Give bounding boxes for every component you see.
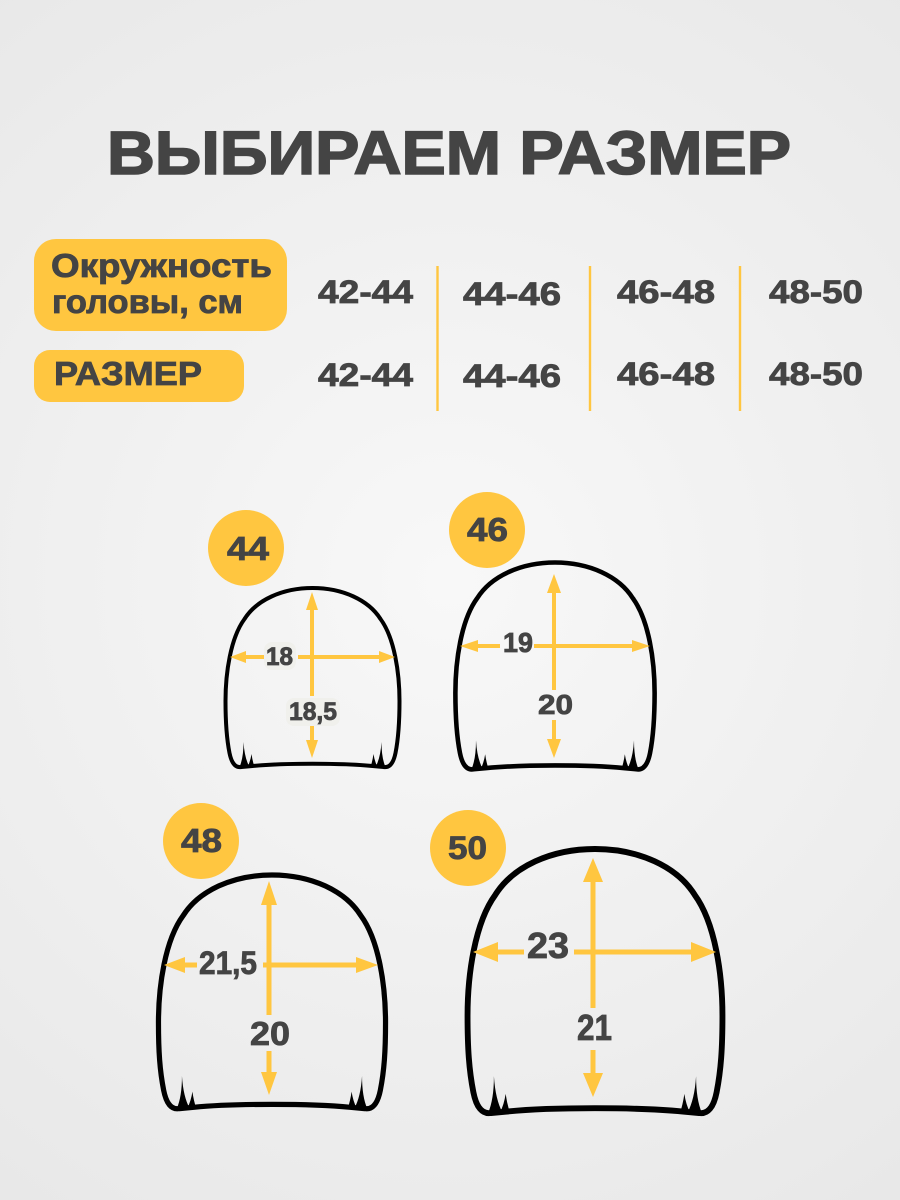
column 2 values: 44-46 [463,276,561,312]
arrows: 44 dimensions [230,592,395,758]
hat: size 48 [158,803,386,1109]
dimension label: 18,5: 18,5 [289,698,337,726]
label: head circumference [34,239,287,331]
icon: hat outline 44 [226,588,400,767]
hat: size 44 [208,510,400,767]
column 3 values [617,274,715,392]
icon: hat outline 46 [455,562,655,769]
arrows: 50 dimensions [473,858,716,1097]
hat: size 46 [449,492,655,769]
column 4 values [769,274,863,392]
column 4 values: 48-50 [769,274,863,310]
icon: hat outline 50 [468,849,722,1113]
label: head circumference: головы, см [52,283,243,320]
badge: 50 [430,810,506,886]
badge: 44 [208,510,284,586]
dimension label: 23: 23 [527,925,569,966]
arrows: 46 dimensions [460,574,650,758]
label: head circumference: Окружность [51,247,272,284]
dimension label: 18: 18 [266,643,293,671]
column 1 values: 42-44 [318,357,413,393]
label: size [34,350,244,402]
dimension label: 20: 20 [538,689,573,720]
icon: hat outline 48 [158,875,386,1109]
column 2 values [463,276,561,394]
badge: 48 [163,803,239,879]
dimension label: 21: 21 [577,1007,612,1048]
badge: 50: 50 [448,830,487,866]
badge: 46 [449,492,525,568]
badge: 46: 46 [467,511,508,548]
column 3 values: 46-48 [617,274,715,310]
column 3 values: 46-48 [617,356,715,392]
column 2 values: 44-46 [463,358,561,394]
hat: size 50 [430,810,722,1113]
column 1 values [318,274,413,393]
dimension label: 20: 20 [250,1015,290,1052]
table: size chart [34,239,863,411]
badge: 44: 44 [227,530,270,567]
label: size: РАЗМЕР [54,355,202,392]
badge: 48: 48 [181,822,222,859]
dimension label: 21,5: 21,5 [199,945,257,981]
dimension label: 19: 19 [503,627,533,658]
column 4 values: 48-50 [769,356,863,392]
title: ВЫБИРАЕМ РАЗМЕР [107,119,791,187]
arrows: 48 dimensions [164,881,378,1095]
column 1 values: 42-44 [318,274,413,310]
